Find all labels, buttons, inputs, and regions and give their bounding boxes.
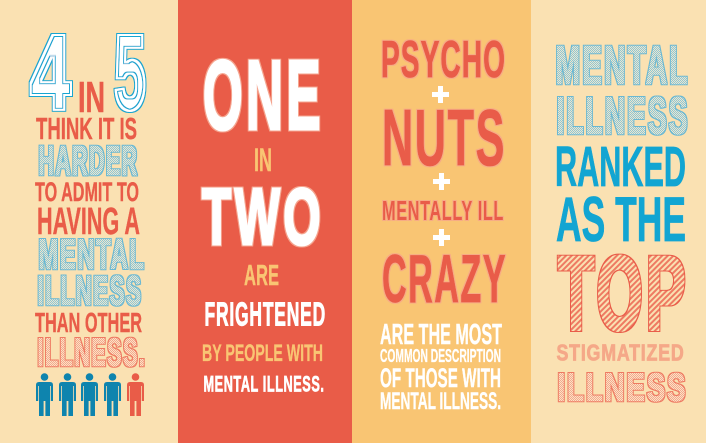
panel: common descriptions	[352, 0, 531, 443]
text: psycho: PSYCHO	[381, 31, 506, 89]
text: to admit to: TO ADMIT TO	[35, 177, 139, 207]
text: than other: THAN OTHER	[35, 307, 142, 338]
text: are: ARE	[244, 260, 279, 292]
numeral 4: 4	[30, 14, 71, 132]
text: of those with: OF THOSE WITH	[380, 363, 501, 393]
plus sign 3	[433, 229, 450, 246]
text: illness period: ILLNESS.	[38, 332, 146, 374]
text: mental: MENTAL	[38, 230, 146, 278]
icon: person 2	[59, 373, 76, 416]
text: frightened: FRIGHTENED	[204, 296, 326, 332]
text: nuts: NUTS	[382, 93, 506, 182]
text: having a: HAVING A	[37, 201, 140, 243]
text: mentally ill: MENTALLY ILL	[382, 195, 504, 226]
text: are the most: ARE THE MOST	[380, 319, 502, 351]
word: in: IN	[78, 73, 105, 122]
text: think it is: THINK IT IS	[36, 111, 137, 146]
panel: 4 in 5	[0, 0, 178, 443]
text: in: IN	[254, 142, 272, 178]
text: mental illness: MENTAL ILLNESS.	[204, 372, 324, 396]
plus sign 1	[432, 86, 449, 103]
icon: person 5 highlighted	[127, 373, 144, 416]
numeral 5: 5	[114, 14, 146, 132]
panel: top stigmatized	[531, 0, 706, 443]
icon row: four of five people	[36, 373, 144, 416]
icon: person 1	[36, 373, 53, 416]
panel: one in two	[178, 0, 352, 443]
text: illness: ILLNESS	[38, 268, 142, 314]
text: mental illness: MENTAL ILLNESS.	[380, 388, 501, 415]
icon: person 4	[104, 373, 121, 416]
text: by people with: BY PEOPLE WITH	[202, 340, 323, 367]
text: common description: COMMON DESCRIPTION	[380, 346, 501, 366]
text: crazy: CRAZY	[382, 241, 507, 317]
icon: person 3	[81, 373, 98, 416]
text: two: TWO	[202, 172, 324, 261]
plus sign 2	[433, 173, 450, 190]
text: one: ONE	[203, 40, 324, 150]
text: harder: HARDER	[38, 138, 138, 184]
